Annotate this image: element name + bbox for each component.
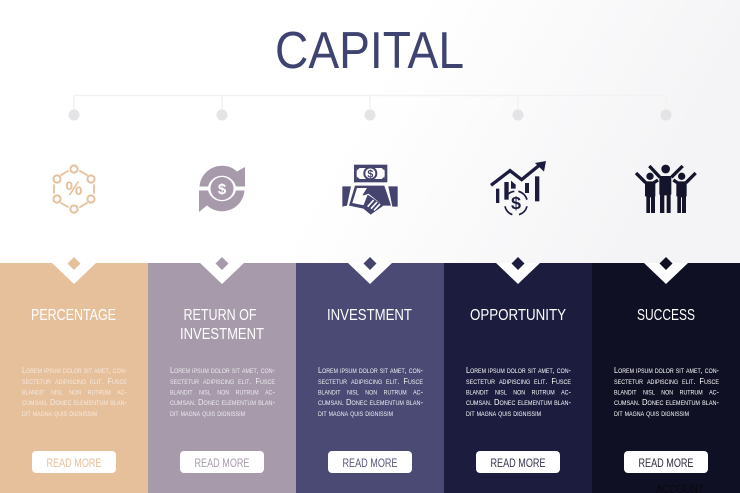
- marker diamond: [660, 257, 672, 270]
- body text: blandit nisl non rutrum ac-: [318, 386, 423, 396]
- title: CAPITAL: [275, 22, 464, 80]
- body text: dit magna quis dignissim: [22, 408, 97, 418]
- read more button: [476, 451, 560, 473]
- icon: growth chart with dollar: [491, 161, 546, 215]
- body text: Lorem ipsum dolor sit amet, con-: [614, 365, 719, 375]
- panel: percentage: [0, 257, 148, 493]
- panel: opportunity: [444, 257, 592, 493]
- read more button: [32, 451, 116, 473]
- body text: Lorem ipsum dolor sit amet, con-: [466, 365, 571, 375]
- read more button: [328, 451, 412, 473]
- marker diamond: [364, 257, 376, 270]
- panel: success: [592, 257, 740, 493]
- marker diamond: [216, 257, 228, 270]
- body text: blandit nisl non rutrum ac-: [22, 386, 127, 396]
- icon: return arrows with dollar: $: [218, 181, 227, 198]
- body text: dit magna quis dignissim: [170, 408, 245, 418]
- body text: cumsan. Donec elementum blan-: [170, 397, 275, 407]
- body text: cumsan. Donec elementum blan-: [466, 397, 571, 407]
- notch: [200, 263, 244, 284]
- body text: dit magna quis dignissim: [466, 408, 541, 418]
- body text: sectetur adipiscing elit. Fusce: [614, 376, 719, 386]
- heading second line: INVESTMENT: [180, 326, 264, 343]
- panel: investment: [296, 257, 444, 493]
- body text: [22, 365, 127, 418]
- icon: percentage hexagon: [53, 165, 95, 213]
- body text: [614, 365, 719, 418]
- notch: [644, 263, 688, 284]
- marker diamond: [68, 257, 80, 270]
- body text: cumsan. Donec elementum blan-: [614, 397, 719, 407]
- notch: [348, 263, 392, 284]
- heading: PERCENTAGE: [31, 307, 116, 324]
- body text: blandit nisl non rutrum ac-: [614, 386, 719, 396]
- body text: sectetur adipiscing elit. Fusce: [22, 376, 127, 386]
- body text: [318, 365, 423, 418]
- body text: [170, 365, 275, 418]
- icon: handshake with banknote: [342, 165, 398, 215]
- body text: [466, 365, 571, 418]
- body text: dit magna quis dignissim: [318, 408, 393, 418]
- icon: three cheering people: [636, 165, 696, 213]
- read more button: READ MORE: [490, 458, 546, 470]
- notch: [52, 263, 96, 284]
- body text: cumsan. Donec elementum blan-: [22, 397, 127, 407]
- body text: Lorem ipsum dolor sit amet, con-: [22, 365, 127, 375]
- icon: return arrows with dollar: [199, 166, 245, 212]
- body text: blandit nisl non rutrum ac-: [170, 386, 275, 396]
- body text: sectetur adipiscing elit. Fusce: [318, 376, 423, 386]
- read more button: READ MORE: [194, 458, 250, 470]
- read more button: [180, 451, 264, 473]
- read more button: READ MORE: [46, 458, 102, 470]
- body text: cumsan. Donec elementum blan-: [318, 397, 423, 407]
- heading: OPPORTUNITY: [470, 307, 566, 324]
- read more button: READ MORE: [342, 458, 398, 470]
- body text: dit magna quis dignissim: [614, 408, 689, 418]
- notch: [496, 263, 540, 284]
- body text: Lorem ipsum dolor sit amet, con-: [170, 365, 275, 375]
- icon: percentage hexagon: %: [66, 179, 83, 200]
- panel: return of investment: [148, 257, 296, 493]
- icon: handshake with banknote: $: [367, 168, 373, 180]
- read more button: READ MORE: [638, 458, 694, 470]
- heading: RETURN OF: [184, 307, 256, 324]
- connector timeline: [68, 95, 672, 120]
- body text: blandit nisl non rutrum ac-: [466, 386, 571, 396]
- body text: sectetur adipiscing elit. Fusce: [466, 376, 571, 386]
- read more button: [624, 451, 708, 473]
- icon: growth chart with dollar: $: [511, 193, 521, 213]
- body text: Lorem ipsum dolor sit amet, con-: [318, 365, 423, 375]
- heading: SUCCESS: [637, 307, 695, 324]
- body text: sectetur adipiscing elit. Fusce: [170, 376, 275, 386]
- marker diamond: [512, 257, 524, 270]
- heading: INVESTMENT: [327, 307, 412, 324]
